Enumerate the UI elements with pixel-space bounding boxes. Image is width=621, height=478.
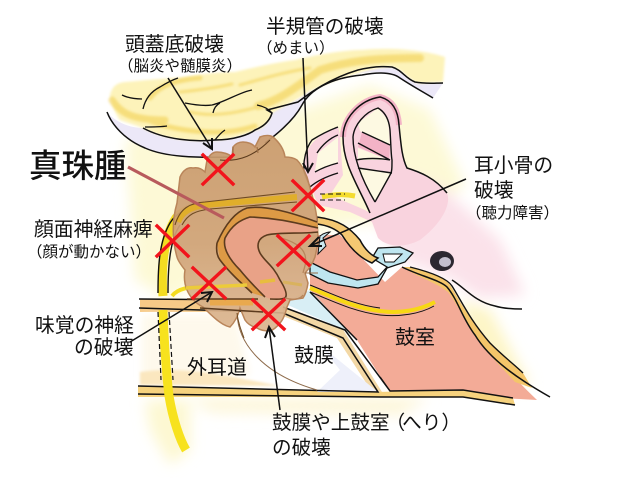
- label: 頭蓋底破壊: （脳炎や髄膜炎）: [118, 57, 242, 75]
- temporal bone walls: [317, 217, 550, 397]
- pink inner ear wash: [375, 175, 525, 298]
- label: 耳小骨の破壊: 破壊: [474, 180, 514, 202]
- label: 耳小骨の破壊: 耳小骨の: [474, 155, 553, 177]
- label: 鼓膜: 鼓膜: [294, 344, 334, 367]
- label: 鼓膜や上鼓室の破壊: の破壊: [272, 437, 331, 459]
- label: 半規管の破壊: （めまい）: [257, 40, 335, 57]
- yellow facial nerve: [158, 204, 435, 450]
- structures visible through the mass: [175, 140, 318, 338]
- eustachian light blue area: [283, 290, 357, 340]
- red cross marks: [157, 155, 323, 329]
- label: 味覚の神経の破壊: 味覚の神経: [35, 315, 134, 337]
- label: 頭蓋底破壊: 頭蓋底破壊: [125, 34, 224, 56]
- cholesteatoma mass: [173, 136, 318, 331]
- ossicle chain: [310, 247, 413, 288]
- label: 顔面神経麻痺: （顔が動かない）: [27, 243, 151, 261]
- pale yellow bone background: [125, 85, 530, 465]
- semicircular canals: [303, 97, 448, 246]
- tympanic cavity: [310, 235, 537, 400]
- label: 鼓室: 鼓室: [395, 326, 435, 349]
- label: 外耳道: 外耳道: [187, 356, 247, 379]
- label: 半規管の破壊: [257, 16, 384, 57]
- pointer line: 真珠腫: [128, 167, 224, 218]
- attic with retraction pocket: [217, 207, 318, 299]
- label: 鼓膜や上鼓室の破壊: [272, 412, 461, 459]
- label: 半規管の破壊: 半規管の破壊: [266, 16, 384, 38]
- label: 味覚の神経の破壊: [35, 315, 134, 359]
- round window: [430, 251, 454, 271]
- ear canal walls: [138, 292, 515, 405]
- arrow: eardrum: [265, 327, 280, 410]
- heading: 真珠腫: 真珠腫: [29, 148, 127, 184]
- skull base membrane: [107, 67, 443, 158]
- arrow: ossicles: [310, 179, 466, 246]
- label: 耳小骨の破壊: [466, 155, 559, 222]
- arrow: taste nerve: [130, 292, 212, 342]
- label: 耳小骨の破壊: （聴力障害）: [466, 204, 559, 222]
- label: 顔面神経麻痺: [27, 219, 153, 261]
- label: 顔面神経麻痺: 顔面神経麻痺: [34, 219, 153, 241]
- label: 鼓膜や上鼓室の破壊: 鼓膜や上鼓室（へり）: [272, 412, 461, 434]
- arrow: skull base: [168, 78, 212, 149]
- label: 味覚の神経の破壊: の破壊: [74, 337, 134, 359]
- brain: [107, 49, 445, 157]
- arrow: semicircular canal: [303, 58, 313, 172]
- label: 頭蓋底破壊: [118, 34, 242, 75]
